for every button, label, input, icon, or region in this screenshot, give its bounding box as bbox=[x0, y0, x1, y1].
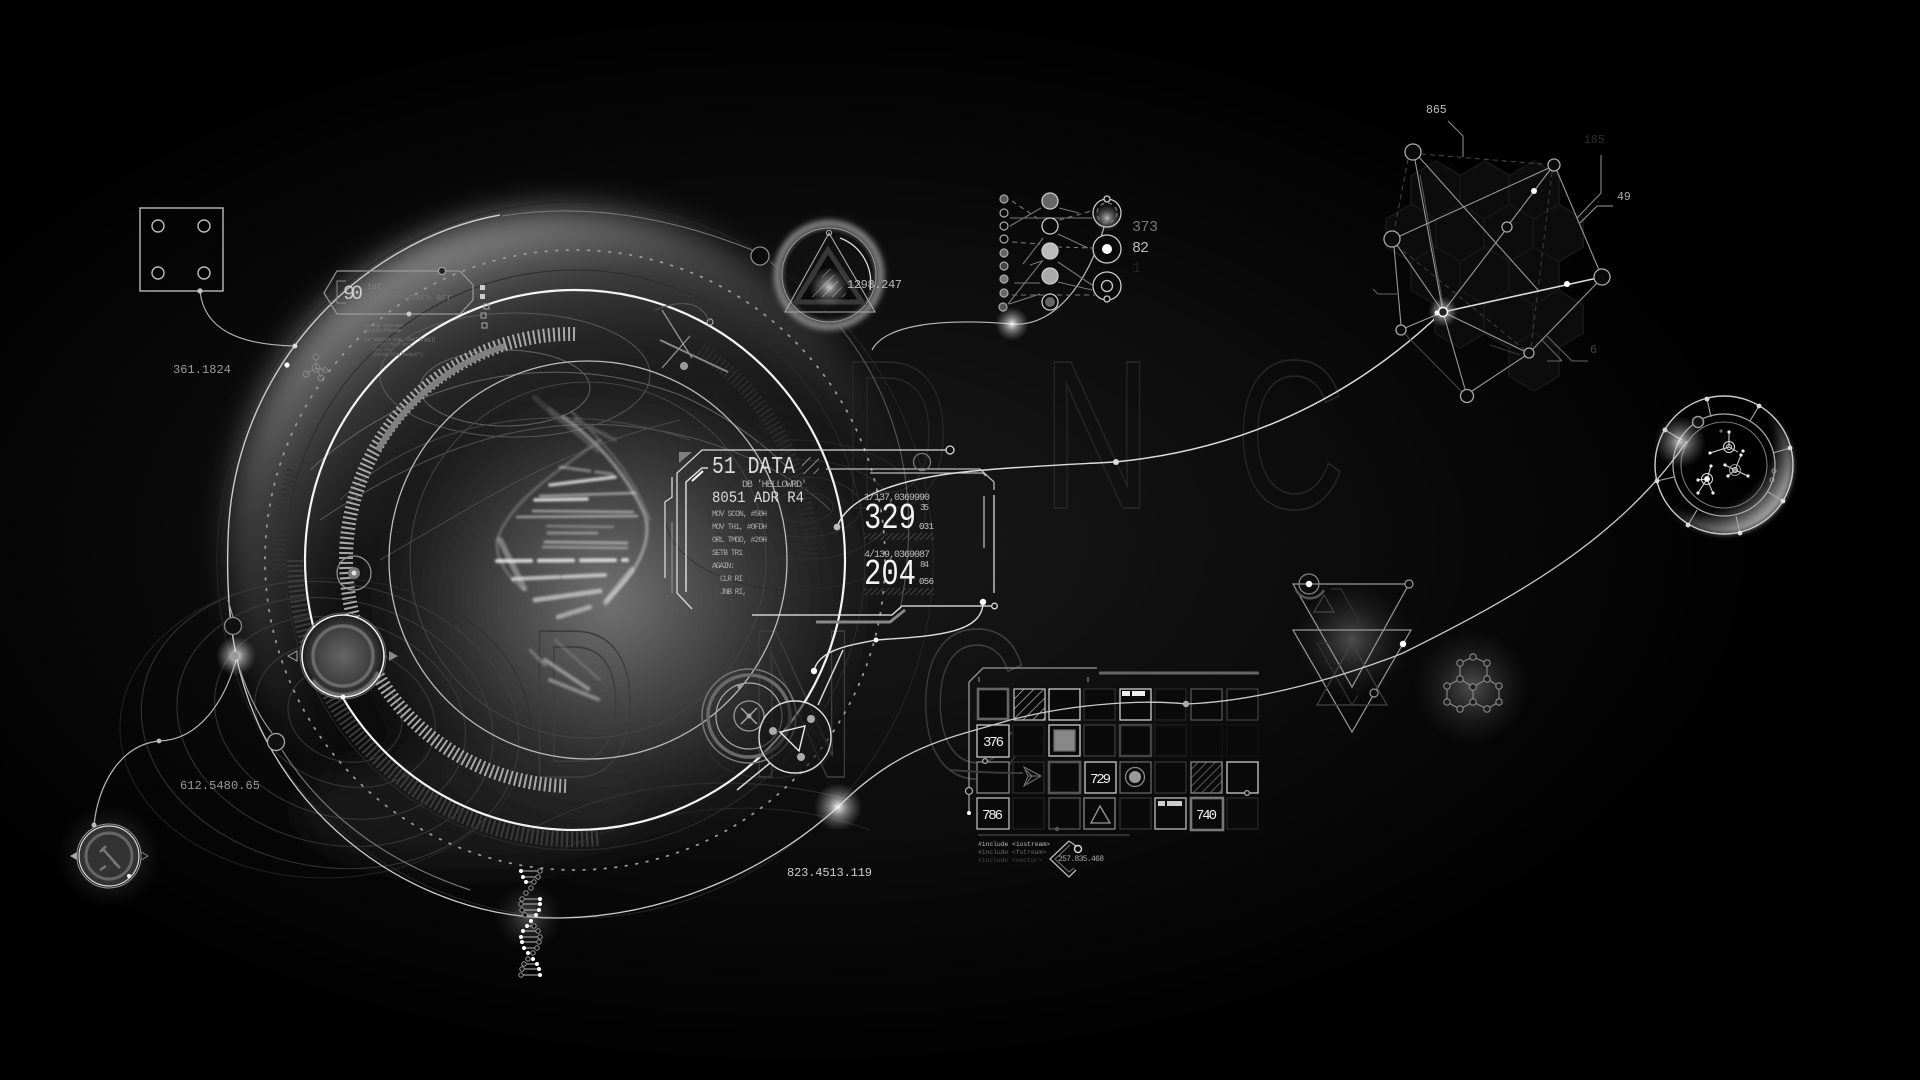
readout 204: 056 bbox=[919, 577, 934, 587]
node chart values: 373 bbox=[1132, 219, 1158, 236]
assembly code block: ORL TMOD, #20H bbox=[712, 536, 767, 545]
heading: database label: DB 'HELLOWRD' bbox=[742, 479, 807, 491]
ghost letters DNC: DNC bbox=[840, 317, 1346, 554]
hexagon molecule icon bbox=[1414, 629, 1530, 745]
assembly code block bbox=[712, 510, 767, 597]
icon: small molecule bbox=[303, 354, 328, 381]
contour lines bbox=[118, 313, 925, 898]
matrix values bbox=[982, 735, 1217, 824]
diamond badge: 257.835.468 bbox=[1058, 855, 1104, 864]
cage labels bbox=[1426, 104, 1631, 357]
readout 204: 4/139,0369087 bbox=[864, 549, 930, 561]
faint code text: int main(int argc, char* argv[]) bbox=[364, 337, 436, 343]
matrix values: 786 bbox=[982, 808, 1003, 824]
panel: code readout 90: 90 bbox=[343, 283, 363, 306]
readout 329: 1/137,0369990 bbox=[864, 492, 930, 504]
left glow node with connectors bbox=[94, 600, 470, 890]
icon: upper node with crossing lines bbox=[655, 304, 728, 372]
panel: code readout 90: vector<char> arr bbox=[368, 293, 452, 303]
haze behind central dial bbox=[230, 210, 900, 880]
matrix values: 376 bbox=[983, 735, 1004, 751]
cage labels: 6 bbox=[1590, 344, 1597, 357]
readout 329: 329 bbox=[864, 498, 916, 539]
heading: address: 8051 ADR R4 bbox=[712, 489, 804, 507]
assembly code block: JNB RI, bbox=[720, 588, 747, 597]
cage labels: 49 bbox=[1617, 191, 1631, 204]
data panel bbox=[665, 446, 997, 622]
small ring beside triangle orb bbox=[751, 247, 769, 265]
ghost letters DNC: DNC bbox=[527, 586, 1028, 823]
assembly code block: AGAIN: bbox=[712, 562, 735, 571]
icon: triangle circle bbox=[737, 650, 843, 790]
faint code text bbox=[364, 323, 436, 358]
matrix values: 740 bbox=[1196, 808, 1217, 824]
connector: panel to lower circle bbox=[811, 599, 986, 674]
triangle cluster bbox=[1293, 574, 1413, 732]
satellite orb bbox=[57, 804, 161, 908]
small dial icon bbox=[337, 556, 371, 590]
include code block: #include <fstream> bbox=[978, 849, 1046, 856]
readout 329: 031 bbox=[919, 522, 934, 532]
icon: triangle orb bbox=[763, 209, 902, 341]
node chart values: 82 bbox=[1132, 240, 1149, 257]
assembly code block: MOV TH1, #0FDH bbox=[712, 523, 767, 532]
faint code text: ifstream file("example"); bbox=[372, 352, 424, 358]
assembly code block: MOV SCON, #50H bbox=[712, 510, 767, 519]
faint code text: #include <iostream> bbox=[364, 323, 404, 329]
right orbital molecule bbox=[1654, 396, 1793, 535]
connector to node chart bbox=[872, 215, 1107, 350]
panel: code readout 90 bbox=[324, 268, 489, 328]
include code block: #include <iostream> bbox=[978, 841, 1050, 848]
long connector: panel to molecule cage bbox=[834, 312, 1442, 530]
cage labels: 865 bbox=[1426, 104, 1447, 117]
assembly code block: CLR RI bbox=[720, 575, 743, 584]
faint code text: vector<char> arr; bbox=[372, 342, 412, 348]
label: 361.1824: 361.1824 bbox=[173, 363, 231, 377]
label: 612.5480.65: 612.5480.65 bbox=[180, 779, 260, 793]
faint code text: char ch; bbox=[372, 347, 392, 353]
include code block bbox=[978, 841, 1050, 864]
ghost letters DNC bbox=[527, 317, 1346, 823]
readout 204: 204 bbox=[864, 554, 916, 595]
panel: central dial rings bbox=[217, 202, 933, 918]
matrix values: 729 bbox=[1090, 772, 1111, 788]
icon: dial with target reticle bbox=[702, 669, 796, 763]
assembly code block: SETB TR1 bbox=[712, 549, 743, 558]
main DNA helix bbox=[497, 398, 650, 700]
include code block: #include <vector> bbox=[978, 857, 1042, 864]
long connector: glow to right orbit bbox=[236, 441, 1687, 918]
panel: tile matrix bbox=[950, 668, 1259, 877]
heading: 51 DATA: 51 DATA bbox=[712, 454, 795, 481]
readout 204: 84 bbox=[920, 560, 929, 570]
small DNA strand bbox=[494, 869, 562, 977]
node chart values bbox=[1132, 219, 1158, 277]
label: 823.4513.119: 823.4513.119 bbox=[787, 866, 872, 880]
panel: code readout 90: int bbox=[367, 283, 381, 292]
node chart values: 1 bbox=[1132, 260, 1141, 277]
diamond badge bbox=[1050, 841, 1104, 877]
left orb bbox=[288, 613, 398, 699]
node chart bbox=[995, 193, 1121, 341]
readout 329: 35 bbox=[920, 503, 929, 513]
striped arc bbox=[346, 334, 575, 786]
value label: 1298.247 bbox=[847, 278, 902, 292]
icon: four-dot square bbox=[140, 208, 297, 368]
faint code text: #include <fstream> bbox=[364, 328, 402, 334]
cage labels: 185 bbox=[1584, 134, 1605, 147]
molecule cage bbox=[1373, 104, 1631, 402]
